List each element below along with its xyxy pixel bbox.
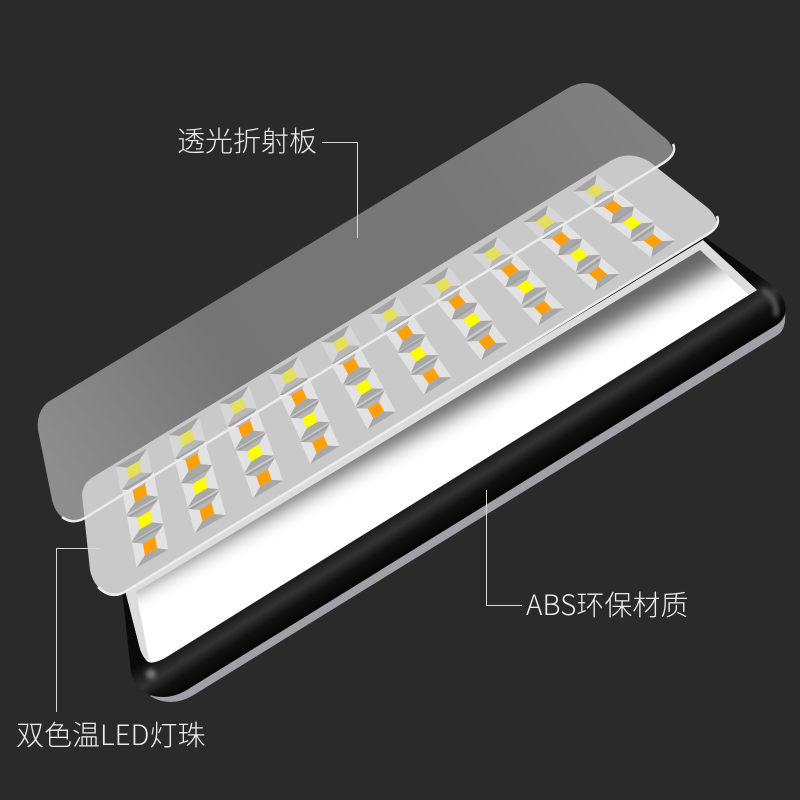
sheet lower edge line (62, 144, 674, 521)
white screen (126, 240, 757, 663)
column 8 (472, 237, 564, 325)
plate lower edge (98, 216, 718, 595)
column 6 (369, 296, 452, 395)
plate shadow (136, 240, 732, 605)
column 1 (116, 448, 168, 568)
label: ABS: ABS环保材质 (526, 584, 688, 624)
black bezel (122, 236, 786, 697)
column 10 (572, 175, 676, 257)
lamp body (122, 238, 786, 702)
light inner rim (125, 240, 757, 660)
column 7 (422, 267, 508, 360)
leader line: LED (56, 548, 100, 712)
panel: LED plate (82, 155, 718, 595)
column 4 (269, 356, 340, 464)
corner highlight (146, 669, 156, 679)
column 3 (219, 386, 283, 498)
label: LED: 双色温LED灯珠 (16, 714, 205, 754)
label: sheet: 透光折射板 (177, 120, 317, 160)
column 9 (523, 205, 620, 291)
panel: light refraction sheet (38, 83, 672, 521)
LED grid (116, 175, 675, 568)
leader line: sheet (322, 142, 358, 238)
column 2 (168, 417, 226, 533)
leader line: ABS (486, 490, 522, 606)
column 5 (321, 325, 396, 429)
silver outer rim (150, 310, 785, 702)
